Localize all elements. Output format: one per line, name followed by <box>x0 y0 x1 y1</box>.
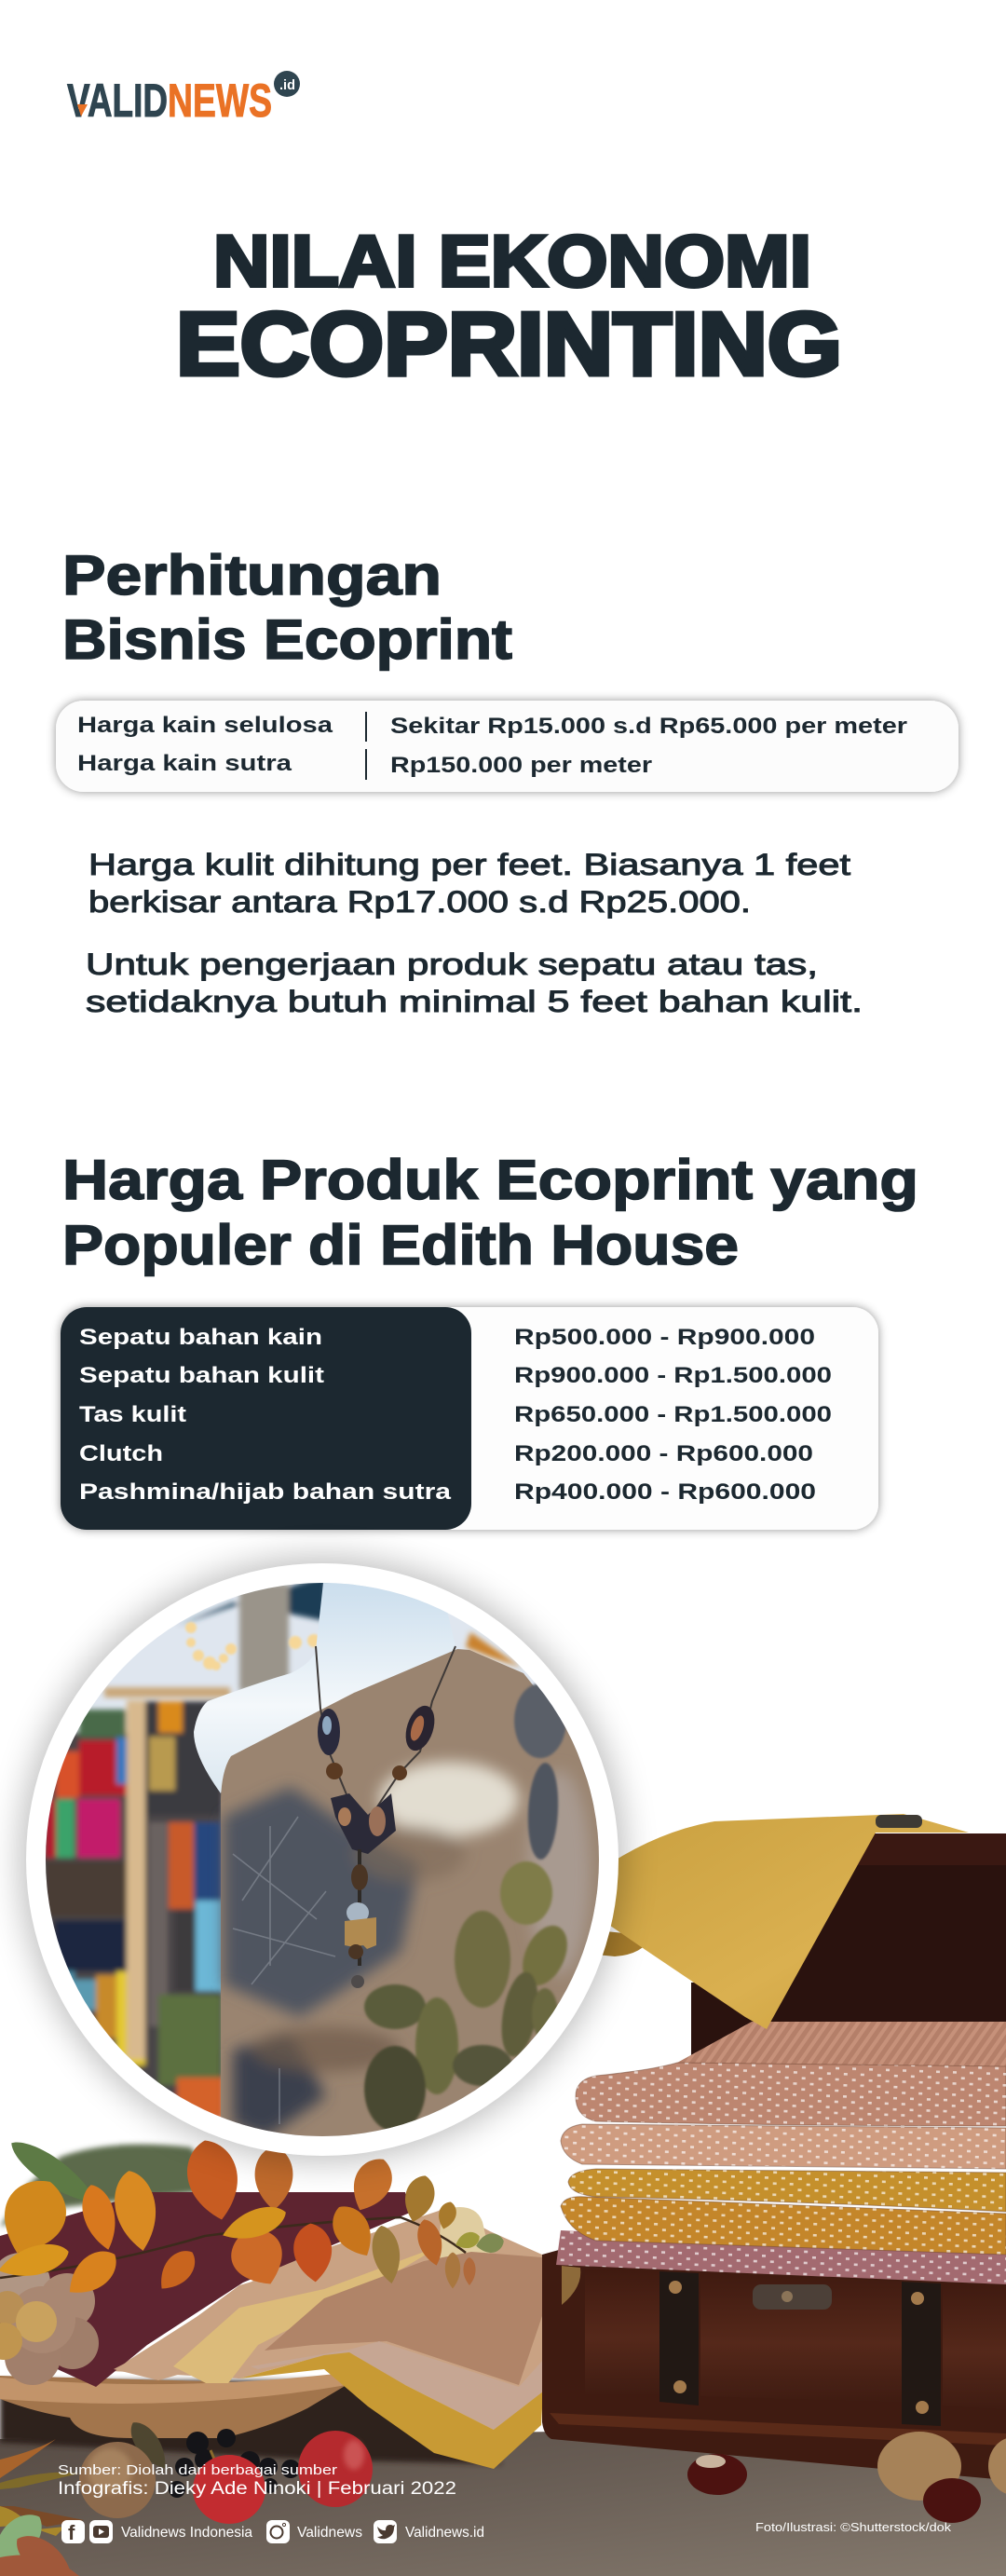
text block: harga kulit: berkisar antara Rp17.000 s.d Rp25.000. <box>88 885 751 919</box>
panel: harga kain: Harga kain sutra <box>77 751 292 776</box>
text block: harga kulit: Harga kulit dihitung per feet. Biasanya 1 feet <box>88 848 850 881</box>
title <box>176 220 842 394</box>
panel: harga produk: Rp650.000 - Rp1.500.000 <box>514 1402 832 1427</box>
panel: harga produk <box>61 1307 878 1530</box>
social media links <box>61 2520 484 2544</box>
panel: harga produk: Clutch <box>79 1441 163 1466</box>
panel: harga produk: Sepatu bahan kain <box>79 1325 322 1350</box>
panel: harga produk: Rp200.000 - Rp600.000 <box>514 1441 813 1466</box>
heading: Harga Produk Ecoprint: Populer di Edith House <box>62 1214 739 1276</box>
logo: Validnews.id: VALID <box>67 75 168 127</box>
credits: source and infographic author: Sumber: Diolah dari berbagai sumber <box>58 2462 337 2478</box>
scene: autumn leaves <box>0 2133 506 2305</box>
heading: Harga Produk Ecoprint: Harga Produk Ecoprint yang <box>62 1149 918 1211</box>
social media links: Validnews.id <box>405 2525 484 2541</box>
panel: harga produk: Rp900.000 - Rp1.500.000 <box>514 1363 832 1388</box>
text block: harga kulit <box>88 848 850 919</box>
heading: Perhitungan Bisnis Ecoprint: Bisnis Ecoprint <box>62 608 512 671</box>
title: ECOPRINTING <box>176 294 842 394</box>
panel: harga produk: Rp400.000 - Rp600.000 <box>514 1479 816 1505</box>
heading: Perhitungan Bisnis Ecoprint <box>62 544 512 671</box>
scene: floor <box>0 2380 1006 2576</box>
scene: wooden plate <box>0 2374 347 2438</box>
panel: harga produk: Tas kulit <box>79 1402 186 1427</box>
mannequin neck <box>194 1574 457 1793</box>
logo: Validnews.id: .id <box>279 77 295 93</box>
panel: harga kain: Rp150.000 per meter <box>390 753 652 778</box>
panel: harga kain <box>56 701 958 792</box>
photo: circular ecoprint shirt on mannequin <box>20 1558 624 2161</box>
scene: mustard cloth draped over lid <box>596 1814 969 2029</box>
scene: fruits and nuts on the table <box>0 2416 373 2576</box>
scene: dried flower and nuts <box>0 2253 99 2385</box>
panel: harga kain: Sekitar Rp15.000 s.d Rp65.000 per meter <box>390 714 907 739</box>
logo: Validnews.id <box>67 71 300 127</box>
scene: folded fabrics on plate <box>0 2145 543 2469</box>
title: NILAI EKONOMI <box>213 220 811 302</box>
panel: harga produk: Sepatu bahan kulit <box>79 1363 324 1388</box>
text block: kebutuhan kulit: setidaknya butuh minimal 5 feet bahan kulit. <box>86 985 863 1018</box>
credits: source and infographic author: Infografis: Dieky Ade Ninoki | Februari 2022 <box>58 2479 456 2499</box>
scene: stacked polka dot fabrics <box>556 2022 1006 2284</box>
credits: source and infographic author <box>58 2462 456 2499</box>
social media links: Validnews <box>297 2525 362 2541</box>
text block: kebutuhan kulit <box>86 947 863 1018</box>
necklace <box>315 1645 456 1807</box>
scene: wooden trunk <box>542 1833 1006 2480</box>
logo: Validnews.id: NEWS <box>168 75 272 127</box>
panel: harga kain: Harga kain selulosa <box>77 713 333 738</box>
heading: Perhitungan Bisnis Ecoprint: Perhitungan <box>62 544 442 607</box>
social media links: Validnews Indonesia <box>121 2525 252 2541</box>
text block: kebutuhan kulit: Untuk pengerjaan produk sepatu atau tas, <box>86 947 818 981</box>
heading: Harga Produk Ecoprint <box>62 1149 918 1276</box>
scene: nuts near trunk <box>687 2432 1006 2523</box>
caption: photo credit: Foto/Ilustrasi: ©Shutterstock/dok <box>755 2520 952 2534</box>
panel: harga produk: Rp500.000 - Rp900.000 <box>514 1325 815 1350</box>
shirt <box>221 1649 605 2143</box>
social media links: f <box>68 2521 75 2544</box>
panel: harga produk: Pashmina/hijab bahan sutra <box>79 1479 452 1505</box>
